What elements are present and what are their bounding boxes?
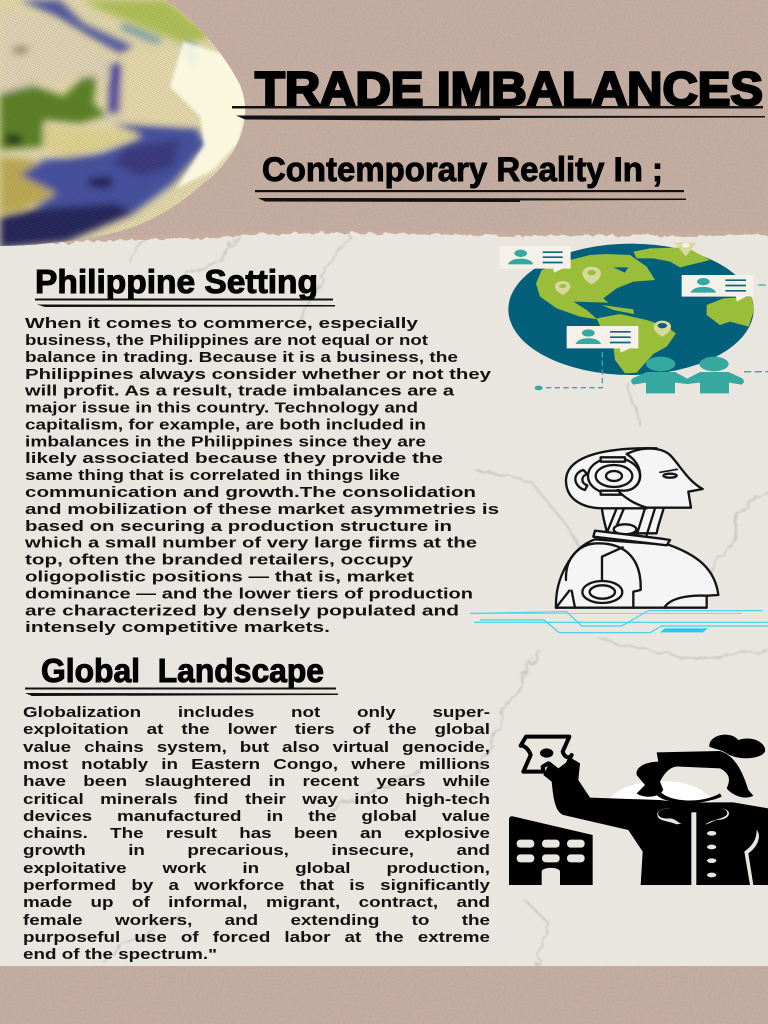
halftone earth photo [0,0,257,250]
text block: Global Landscape body: devices manufactured in the global value [23,809,490,825]
hair [637,751,753,798]
text block: Global Landscape body: critical minerals find their way into high-tech [23,792,490,808]
ear rings [588,458,640,494]
icon: world map globe with people [499,243,768,393]
text block: Philippine Setting body: based on securing a production structure in [25,519,452,535]
title: TRADE IMBALANCES [255,62,763,115]
heading: Global Landscape: Global Landscape [41,652,324,689]
text block: Philippine Setting body: intensely competitive markets. [25,620,330,636]
top tan torn-paper banner [0,0,768,246]
text block: Philippine Setting body: will profit. As a result, trade imbalances are a [24,384,455,400]
icon: robot bust [556,448,718,608]
text block: Global Landscape body: most notably in Eastern Congo, where millions [23,757,490,773]
text block: Global Landscape body: chains. The result has been an explosive [23,826,490,842]
text block: Global Landscape body: Globalization includes not only super- [23,705,490,721]
text block: Philippine Setting body: capitalism, for example, are both included in [25,417,426,433]
text block: Global Landscape body: performed by a workforce that is significantly [23,878,490,894]
map pins [555,243,697,337]
text block: Philippine Setting body: dominance — and the lower tiers of production [25,586,473,602]
profile cards [499,246,753,353]
text block: Philippine Setting body: likely associated because they provide the [25,451,443,467]
text block: Global Landscape body: female workers, and extending to the [23,913,490,929]
chin [654,788,722,803]
text block: Global Landscape body: value chains system, but also virtual genocide, [23,740,490,756]
text block: Philippine Setting body: which a small number of very large firms at the [24,536,477,552]
face [617,449,703,508]
neck [602,507,664,533]
text block: Global Landscape body: end of the spectrum." [23,947,217,963]
text block: Philippine Setting body: and mobilization of these market asymmetries is [25,502,499,518]
subtitle: Contemporary Reality In ; [262,151,663,189]
shoulders and torso [556,539,718,608]
heading: Philippine Setting: Philippine Setting [35,263,318,300]
jacket details [691,812,696,886]
building [509,816,593,885]
text block: Philippine Setting body: business, the Philippines are not equal or not [25,333,428,349]
continents [536,247,754,373]
bun [709,735,765,758]
text block: Philippine Setting body: same thing that is correlated in things like [25,468,400,484]
icon: worker holding banknote with building [509,735,768,886]
text block: Philippine Setting body: communication and growth.The consolidation [25,485,476,501]
text block: Global Landscape body: growth in precarious, insecure, and [23,843,490,859]
text block: Philippine Setting body: Philippines always consider whether or not they [25,367,492,383]
circuit lines [470,611,768,633]
white halo [610,781,713,803]
text block: Philippine Setting body: oligopolistic positions — that is, market [25,570,414,586]
text block: Global Landscape body: purposeful use of forced labor at the extreme [23,930,490,946]
text block: Philippine Setting body: top, often the branded retailers, occupy [25,553,414,569]
text block: Global Landscape body [23,705,490,963]
banknote [521,737,572,772]
bright rim of the planet [170,42,250,188]
bottom tan band [0,966,768,1024]
text block: Philippine Setting body [24,316,499,636]
text block: Global Landscape body: made up of informal, migrant, contract, and [23,895,490,911]
text block: Philippine Setting body: balance in trading. Because it is a business, the [25,350,458,366]
head back [566,448,657,508]
text block: Philippine Setting body: imbalances in the Philippines since they are [25,434,426,450]
dashed connectors [543,352,602,388]
text block: Philippine Setting body: major issue in this country. Technology and [25,400,418,416]
text block: Global Landscape body: exploitative work in global production, [23,861,490,877]
text block: Global Landscape body: exploitation at the lower tiers of the global [23,722,490,738]
text block: Philippine Setting body: When it comes to commerce, especially [25,316,419,332]
text block: Global Landscape body: have been slaughtered in recent years while [23,774,490,790]
raised arm and body [543,758,768,885]
subtitle underlines [255,190,686,202]
text block: Philippine Setting body: are characterized by densely populated and [25,603,459,619]
title underlines [232,106,765,120]
globe ocean [508,244,754,375]
two people holding hands [631,357,744,393]
